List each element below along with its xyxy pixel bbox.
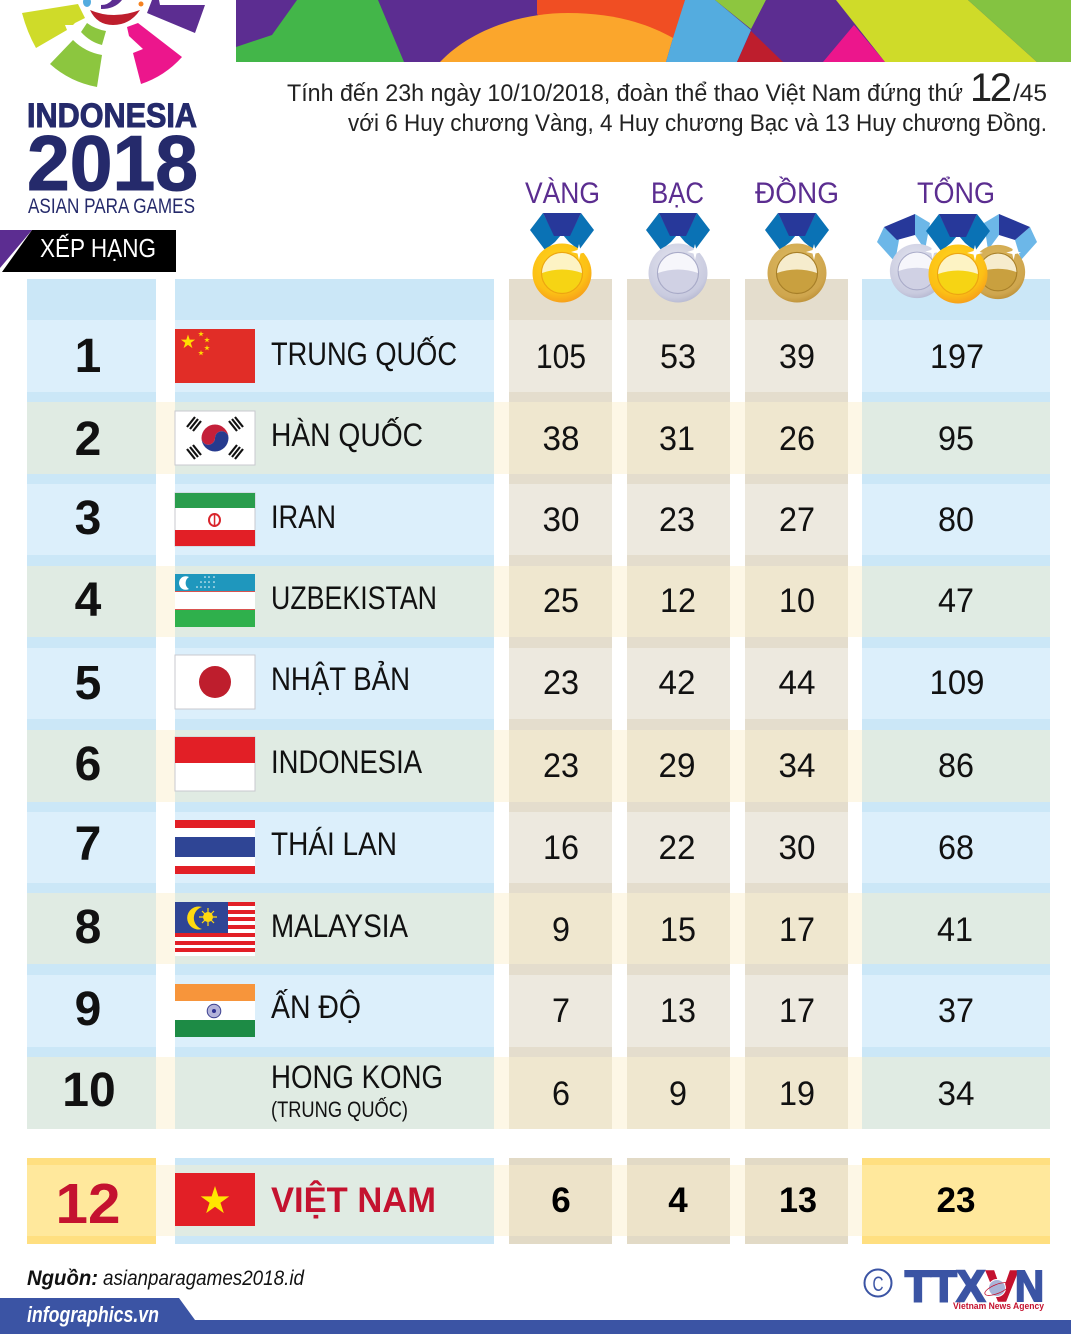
row 4: Uzbekistan (27, 566, 1050, 637)
row 3: Iran: 3 (75, 492, 101, 545)
row 9: Ấn Độ: 37 (938, 992, 974, 1030)
TTXVN logo: TTX (905, 1262, 985, 1311)
row 4: Uzbekistan: 12 (660, 582, 696, 620)
flag: Malaysia (175, 902, 255, 956)
row 2: Hàn Quốc: 95 (938, 420, 974, 458)
row 9: Ấn Độ: 17 (779, 992, 815, 1030)
row 4: Uzbekistan: 47 (938, 582, 974, 620)
row 8: Malaysia: 9 (552, 911, 570, 949)
row 2: Hàn Quốc: 38 (542, 420, 580, 458)
flag: Uzbekistan (175, 574, 255, 627)
logo: Indonesia 2018 Asian Para Games (22, 0, 205, 218)
row 8: Malaysia: 17 (779, 911, 815, 949)
row 4: Uzbekistan: 10 (779, 582, 815, 620)
TTXVN logo: V (986, 1262, 1019, 1311)
icon: bronze medal (765, 213, 829, 302)
row 3: Iran: 27 (779, 501, 815, 539)
row: Việt Nam highlight: 12 (56, 1172, 120, 1236)
icon: copyright (864, 1270, 892, 1296)
flag: Japan (175, 655, 255, 709)
TTXVN logo: N (1015, 1262, 1044, 1311)
row 1: Trung Quốc: 105 (536, 338, 586, 376)
row 1: Trung Quốc: 53 (660, 338, 696, 376)
column heading: silver: BẠC (651, 177, 704, 210)
row 5: Nhật Bản: 109 (930, 664, 984, 702)
flag: Vietnam (175, 1173, 255, 1226)
row 5: Nhật Bản: NHẬT BẢN (271, 661, 410, 697)
row 1: Trung Quốc: 197 (930, 338, 984, 376)
row 8: Malaysia (27, 893, 1050, 964)
TTXVN logo: Vietnam News Agency (953, 1301, 1045, 1312)
row 4: Uzbekistan: UZBEKISTAN (271, 580, 437, 616)
footer bar (0, 1298, 1071, 1334)
row 9: Ấn Độ: 9 (75, 983, 101, 1036)
summary text: Tính đến 23h ngày 10/10/2018, đoàn thể thao Việt Nam đứng thứ (287, 80, 963, 107)
flag: India (175, 984, 255, 1037)
row 9: Ấn Độ: 7 (552, 992, 570, 1030)
row: Việt Nam highlight: 13 (779, 1181, 817, 1220)
row 10: Hong Kong: HONG KONG (271, 1059, 443, 1095)
row 5: Nhật Bản: 42 (658, 664, 696, 702)
row 1: Trung Quốc: 1 (75, 330, 101, 383)
row 2: Hàn Quốc: 26 (779, 420, 815, 458)
icon: logo petals (22, 0, 205, 87)
row 10: Hong Kong: (TRUNG QUỐC) (271, 1096, 408, 1122)
row 7: Thái Lan (27, 812, 1050, 883)
row 10: Hong Kong: 19 (779, 1075, 815, 1113)
summary text (287, 66, 1047, 137)
row 7: Thái Lan: 30 (778, 829, 816, 867)
row: Việt Nam highlight: VIỆT NAM (271, 1180, 436, 1220)
row 3: Iran (27, 484, 1050, 555)
row 8: Malaysia: MALAYSIA (271, 908, 409, 944)
row 2: Hàn Quốc: 31 (659, 420, 695, 458)
row 3: Iran: 23 (659, 501, 695, 539)
row 8: Malaysia: 15 (660, 911, 696, 949)
TTXVN logo (864, 1262, 1045, 1312)
row 2: Hàn Quốc (27, 402, 1050, 474)
row 3: Iran: IRAN (271, 499, 336, 535)
row 1: Trung Quốc: 39 (779, 338, 815, 376)
row 7: Thái Lan: 16 (543, 829, 579, 867)
row 6: Indonesia: 29 (658, 747, 696, 785)
row 5: Nhật Bản: 23 (543, 664, 579, 702)
flag: Thailand (175, 820, 255, 874)
flag: Iran (175, 493, 255, 546)
row 10: Hong Kong: 34 (938, 1075, 974, 1113)
row 8: Malaysia: 41 (937, 911, 973, 949)
row 7: Thái Lan: THÁI LAN (271, 826, 397, 862)
column heading: total: TỔNG (917, 176, 995, 210)
table column backgrounds (27, 279, 1050, 1129)
row 5: Nhật Bản: 5 (75, 657, 101, 710)
row 1: Trung Quốc: TRUNG QUỐC (271, 336, 457, 372)
row: Việt Nam highlight: 6 (551, 1181, 571, 1220)
row 5: Nhật Bản: 44 (778, 664, 816, 702)
row 9: Ấn Độ: ẤN ĐỘ (271, 989, 361, 1025)
column heading: bronze: ĐỒNG (755, 176, 839, 210)
row 6: Indonesia: 6 (75, 738, 101, 791)
row 7: Thái Lan: 22 (658, 829, 696, 867)
row: Việt Nam highlight: 4 (668, 1181, 688, 1220)
row 3: Iran: 80 (938, 501, 974, 539)
row 10: Hong Kong: 6 (552, 1075, 570, 1113)
icon: silver medal (646, 213, 710, 302)
row 6: Indonesia (27, 730, 1050, 802)
row 7: Thái Lan: 7 (75, 818, 101, 871)
logo text: INDONESIA (27, 97, 197, 135)
logo text: ASIAN PARA GAMES (28, 195, 195, 218)
top colour banner (236, 0, 1071, 62)
summary text: 12 (970, 66, 1012, 110)
summary text: /45 (1013, 80, 1047, 107)
row 2: Hàn Quốc: HÀN QUỐC (271, 417, 423, 453)
row 8: Malaysia: 8 (75, 901, 101, 954)
row 10: Hong Kong: 10 (62, 1064, 116, 1117)
source note: Nguồn: (27, 1267, 98, 1290)
flag: China (175, 329, 255, 383)
icon: copyright: C (872, 1273, 884, 1296)
row 1: Trung Quốc (27, 320, 1050, 392)
row 5: Nhật Bản (27, 648, 1050, 719)
row 9: Ấn Độ (27, 975, 1050, 1047)
icon: three medals (877, 214, 1037, 304)
row 4: Uzbekistan: 4 (75, 574, 102, 627)
row 9: Ấn Độ: 13 (660, 992, 696, 1030)
column heading: gold: VÀNG (525, 177, 600, 210)
heading tag: rank (0, 230, 176, 272)
row 10: Hong Kong: 9 (669, 1075, 687, 1113)
row 6: Indonesia: 23 (543, 747, 579, 785)
row 2: Hàn Quốc: 2 (75, 413, 101, 466)
source note (27, 1267, 305, 1290)
row 6: Indonesia: 86 (938, 747, 974, 785)
heading tag: rank: XẾP HẠNG (40, 233, 156, 263)
row: Việt Nam highlight (27, 1158, 1050, 1244)
flag: Indonesia (175, 737, 255, 791)
row 4: Uzbekistan: 25 (543, 582, 579, 620)
logo text: 2018 (27, 119, 198, 207)
row 6: Indonesia: 34 (778, 747, 816, 785)
row 7: Thái Lan: 68 (938, 829, 974, 867)
row: Việt Nam highlight: 23 (936, 1181, 976, 1220)
row 3: Iran: 30 (542, 501, 580, 539)
footer bar: infographics.vn (27, 1302, 159, 1327)
flag: South Korea (175, 411, 255, 465)
icon: gold medal (530, 213, 594, 302)
row 6: Indonesia: INDONESIA (271, 744, 423, 780)
source note: asianparagames2018.id (103, 1267, 305, 1290)
row 10: Hong Kong (27, 1057, 1050, 1129)
